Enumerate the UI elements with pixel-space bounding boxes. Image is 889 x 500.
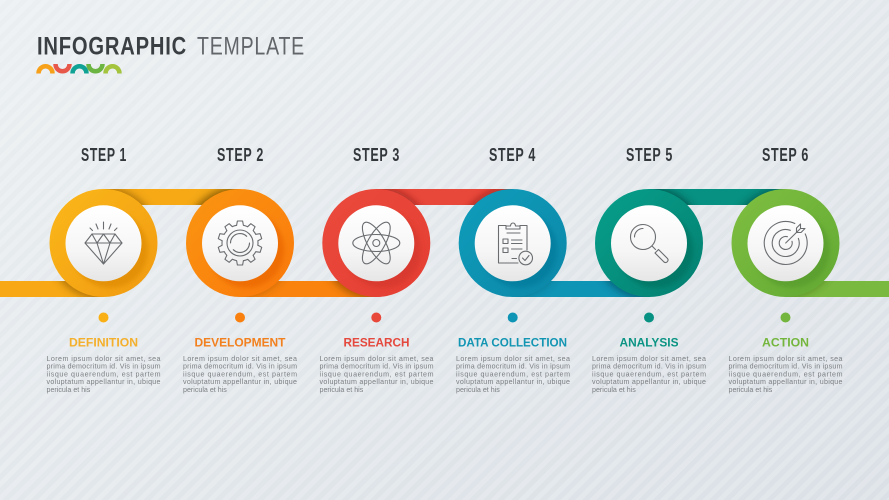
step 5 text: voluptatum appellantur in, ubique	[592, 378, 706, 386]
step 2 text: prima democritum id. Vis in ipsum	[183, 363, 297, 371]
step 2 heading: STEP 2	[217, 145, 264, 165]
step 2 ring	[186, 189, 294, 297]
step 6 text: prima democritum id. Vis in ipsum	[728, 363, 843, 371]
step 3 text: voluptatum appellantur in, ubique	[320, 378, 434, 386]
step 6 ring	[732, 189, 840, 297]
step 3 marker	[371, 312, 381, 322]
step 3 label: RESEARCH	[344, 338, 410, 350]
step 2 text: voluptatum appellantur in, ubique	[183, 378, 297, 386]
step 6 text: iisque quaerendum, est partem	[728, 370, 843, 378]
icon: clipboard	[498, 223, 532, 265]
step 2 text: iisque quaerendum, est partem	[183, 370, 297, 378]
step 6 text: Lorem ipsum dolor sit amet, sea	[728, 355, 843, 363]
step 2 marker	[235, 312, 245, 322]
step 3 heading: STEP 3	[353, 145, 400, 165]
step 5 text: pericula et his	[592, 386, 636, 394]
icon: diamond	[85, 222, 122, 264]
step 5 heading: STEP 5	[626, 145, 673, 165]
step 1 text: prima democritum id. Vis in ipsum	[46, 363, 161, 371]
step 1 ring	[50, 189, 158, 297]
step 3 text: pericula et his	[320, 386, 364, 394]
step 5 ring	[595, 189, 703, 297]
step 5 text: prima democritum id. Vis in ipsum	[592, 363, 706, 371]
step 6 text: pericula et his	[728, 386, 773, 394]
step 5 text: iisque quaerendum, est partem	[592, 370, 706, 378]
step 1 marker	[98, 312, 108, 322]
step 1 text: iisque quaerendum, est partem	[46, 370, 161, 378]
connector: step 3 to step 4	[377, 189, 512, 205]
title: INFOGRAPHIC	[37, 32, 187, 60]
connector: step 5 to step 6	[650, 189, 785, 205]
step 1 text: voluptatum appellantur in, ubique	[46, 378, 161, 386]
step 6 marker	[780, 312, 790, 322]
step 6 text: voluptatum appellantur in, ubique	[728, 378, 843, 386]
step 3 text	[320, 355, 434, 394]
title decoration: coloured arcs	[38, 64, 120, 74]
step 5 panel	[592, 145, 706, 394]
connector: step 1 to step 2	[104, 189, 240, 205]
step 3 panel	[320, 145, 434, 394]
step 1 label: DEFINITION	[69, 338, 138, 350]
step 4 text: pericula et his	[456, 386, 500, 394]
title: TEMPLATE	[197, 32, 305, 60]
step 1 text: pericula et his	[46, 386, 91, 394]
title	[37, 32, 305, 60]
step 4 text: prima democritum id. Vis in ipsum	[456, 363, 570, 371]
step 1 text: Lorem ipsum dolor sit amet, sea	[46, 355, 161, 363]
step 1 heading: STEP 1	[81, 145, 127, 165]
step 5 text: Lorem ipsum dolor sit amet, sea	[592, 355, 706, 363]
step 1 text	[46, 355, 161, 394]
connector: lead-in yellow	[0, 281, 103, 297]
step 4 marker	[508, 312, 518, 322]
icon: target with arrow	[764, 221, 807, 264]
icon: atom	[353, 218, 400, 268]
step 4 text: Lorem ipsum dolor sit amet, sea	[456, 355, 570, 363]
icon: magnifying glass	[630, 224, 668, 262]
step 4 text	[456, 355, 570, 394]
icon: gear	[217, 221, 263, 265]
step 2 panel	[183, 145, 297, 394]
step 4 ring	[459, 189, 567, 297]
connector: step 2 to step 3	[240, 281, 376, 297]
step 4 text: iisque quaerendum, est partem	[456, 370, 570, 378]
step 3 text: iisque quaerendum, est partem	[320, 370, 434, 378]
step 4 panel	[456, 145, 570, 394]
step 3 text: Lorem ipsum dolor sit amet, sea	[320, 355, 434, 363]
connector: step 4 to step 5	[513, 281, 650, 297]
step 3 ring	[322, 189, 430, 297]
step 1 panel	[46, 145, 161, 394]
step 6 heading: STEP 6	[762, 145, 809, 165]
step 2 text	[183, 355, 297, 394]
step 5 text	[592, 355, 706, 394]
step 4 label: DATA COLLECTION	[458, 338, 567, 350]
step 2 text: pericula et his	[183, 386, 227, 394]
step 6 panel	[728, 145, 843, 394]
step 5 label: ANALYSIS	[620, 338, 679, 350]
step 4 heading: STEP 4	[489, 145, 536, 165]
step 3 text: prima democritum id. Vis in ipsum	[320, 363, 434, 371]
step 6 text	[728, 355, 843, 394]
step 6 label: ACTION	[762, 338, 809, 350]
step 2 label: DEVELOPMENT	[194, 338, 286, 350]
connector: lead-out green	[786, 281, 889, 297]
step 4 text: voluptatum appellantur in, ubique	[456, 378, 570, 386]
step 2 text: Lorem ipsum dolor sit amet, sea	[183, 355, 297, 363]
step 5 marker	[644, 312, 654, 322]
